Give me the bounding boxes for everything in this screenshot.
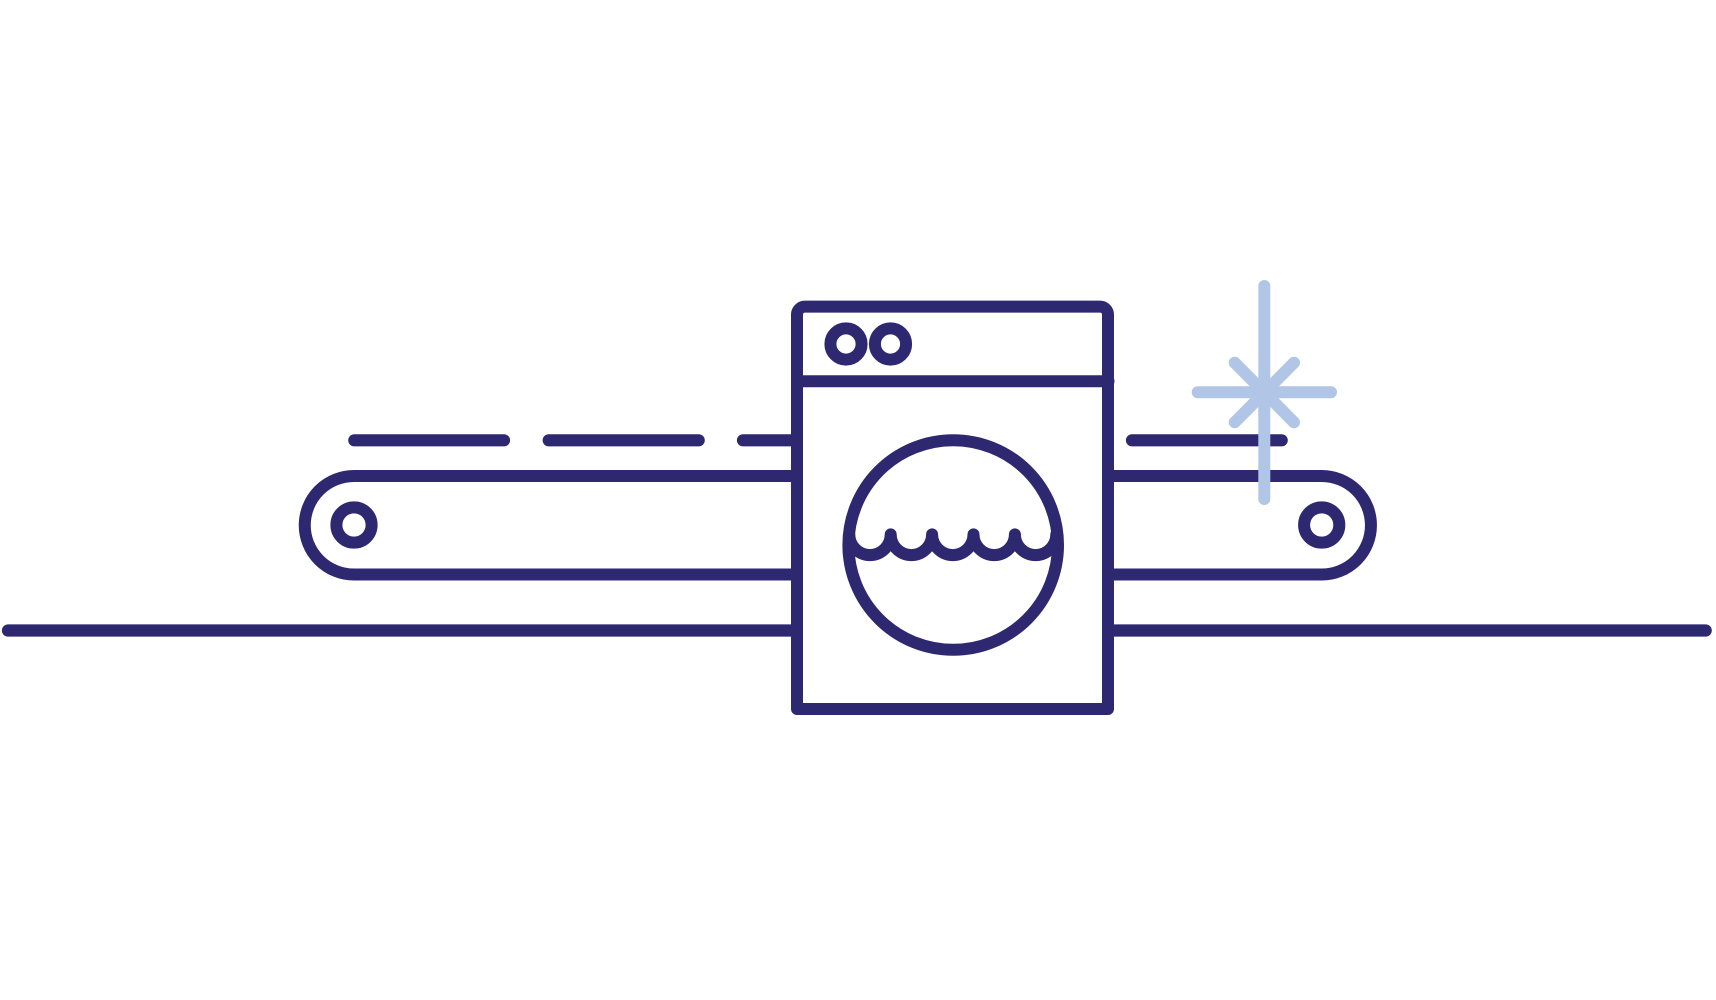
control knobs (830, 328, 906, 360)
right conveyor belt with roller (1108, 476, 1371, 574)
sparkle star (1198, 286, 1331, 499)
machine body (797, 307, 1108, 709)
drum door (848, 440, 1058, 650)
water waves (849, 534, 1056, 555)
control panel divider (797, 375, 1108, 387)
ground line (8, 624, 1706, 637)
items on belt: dashes (354, 434, 1282, 446)
washing machine (797, 307, 1108, 709)
left conveyor belt with roller (305, 476, 797, 574)
